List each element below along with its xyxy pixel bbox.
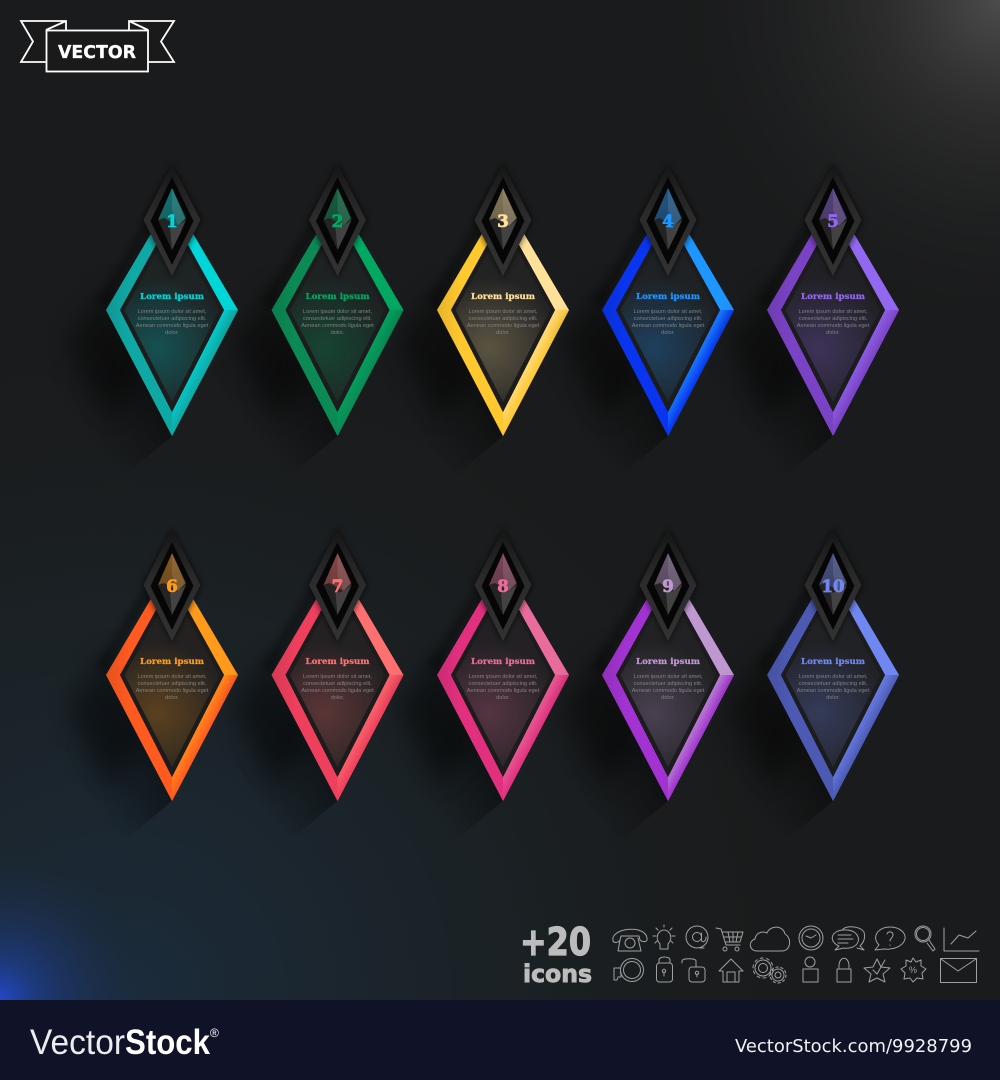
body text 4: Lorem ipsum dolor sit amet, — [633, 309, 703, 315]
long shadow 2 — [208, 222, 338, 486]
icon: light bulb — [653, 925, 675, 949]
ring 8 — [437, 563, 569, 801]
ring 10 — [767, 563, 899, 801]
icon: star check — [864, 959, 890, 982]
number gem 1 — [142, 163, 202, 278]
body text 10: Aenean commodo ligula eget — [797, 688, 870, 694]
body text 7: Lorem ipsum dolor sit amet, — [303, 674, 372, 680]
body text 7: consectetuer adipiscing elit. — [303, 681, 372, 687]
heading 10: Lorem ipsum — [801, 657, 865, 667]
body text 3: consectetuer adipiscing elit. — [469, 316, 538, 322]
heading 5: Lorem ipsum — [801, 292, 865, 302]
panel 1 — [120, 216, 224, 412]
icon: house — [719, 959, 743, 982]
long shadow 1 — [42, 222, 172, 486]
body text 2: dolor. — [331, 330, 345, 336]
number gem 2 — [308, 163, 368, 278]
body text 6: Aenean commodo ligula eget — [136, 688, 209, 694]
ring 7 — [272, 563, 404, 801]
ring 2 — [272, 198, 404, 436]
number gem 9 — [638, 528, 698, 643]
number gem 3 — [473, 163, 533, 278]
icon set — [613, 925, 979, 983]
label: +20 icons: icons — [523, 960, 592, 988]
body text 3: Lorem ipsum dolor sit amet, — [468, 309, 538, 315]
icon: lock — [656, 957, 672, 982]
logo: VectorStock: Vector — [30, 1023, 125, 1062]
heading 3: Lorem ipsum — [471, 292, 535, 302]
card 6 — [42, 528, 238, 851]
icon: gears — [753, 958, 786, 983]
icon: shopping cart — [716, 928, 743, 951]
body text 2: Lorem ipsum dolor sit amet, — [303, 309, 372, 315]
body text 1: dolor. — [165, 330, 179, 336]
badge: vector ribbon: VECTOR — [58, 42, 136, 63]
body text 7: Aenean commodo ligula eget — [301, 688, 374, 694]
heading 2: Lorem ipsum — [306, 292, 370, 302]
number gem 6 — [142, 528, 202, 643]
panel 8 — [451, 581, 555, 777]
card 10 — [703, 528, 899, 851]
logo: VectorStock: ® — [210, 1026, 219, 1040]
footer bar — [0, 1000, 1000, 1080]
long shadow 3 — [373, 222, 503, 486]
body text 2: Aenean commodo ligula eget — [301, 323, 374, 329]
panel 6 — [120, 581, 224, 777]
body text 8: Lorem ipsum dolor sit amet, — [468, 674, 538, 680]
number 10: 10 — [822, 577, 844, 596]
number 7: 7 — [332, 577, 343, 596]
long shadow 10 — [703, 587, 833, 851]
body text 3: Aenean commodo ligula eget — [467, 323, 540, 329]
icon: clock — [799, 926, 823, 950]
number 9: 9 — [662, 577, 674, 596]
label: +20 icons: +20 — [520, 920, 591, 964]
number gem 10 — [803, 528, 863, 643]
icon: telephone — [613, 929, 647, 951]
logo: VectorStock — [30, 1023, 219, 1062]
footer id text: VectorStock.com/9928799 — [735, 1036, 972, 1057]
icon: magnifier — [915, 926, 935, 951]
card 8 — [373, 528, 569, 851]
body text 4: Aenean commodo ligula eget — [632, 323, 705, 329]
body text 6: dolor. — [165, 695, 179, 701]
ring 3 — [437, 198, 569, 436]
body text 1: Lorem ipsum dolor sit amet, — [137, 309, 207, 315]
body text 6: consectetuer adipiscing elit. — [138, 681, 207, 687]
body text 5: Lorem ipsum dolor sit amet, — [798, 309, 868, 315]
number 3: 3 — [497, 212, 509, 231]
icon: chat bubbles — [832, 927, 865, 950]
ring 9 — [602, 563, 734, 801]
icon: man — [803, 957, 818, 982]
panel 9 — [616, 581, 720, 777]
body text 8: consectetuer adipiscing elit. — [469, 681, 538, 687]
long shadow 7 — [208, 587, 338, 851]
body text 1: consectetuer adipiscing elit. — [138, 316, 207, 322]
card 9 — [538, 528, 734, 851]
long shadow 4 — [538, 222, 668, 486]
number gem 8 — [473, 528, 533, 643]
number 1: 1 — [166, 212, 178, 231]
body text 6: Lorem ipsum dolor sit amet, — [137, 674, 207, 680]
body text 3: dolor. — [496, 330, 510, 336]
icon: open lock — [682, 959, 705, 982]
card 2 — [208, 163, 404, 486]
body text 10: consectetuer adipiscing elit. — [799, 681, 868, 687]
body text 10: dolor. — [826, 695, 840, 701]
panel 5 — [781, 216, 885, 412]
body text 8: Aenean commodo ligula eget — [467, 688, 540, 694]
body text 2: consectetuer adipiscing elit. — [303, 316, 372, 322]
icon: at sign — [686, 926, 708, 948]
heading 6: Lorem ipsum — [140, 657, 204, 667]
body text 5: consectetuer adipiscing elit. — [799, 316, 868, 322]
heading 9: Lorem ipsum — [636, 657, 700, 667]
logo: VectorStock: Stock — [125, 1023, 210, 1062]
icon: percent badge — [901, 958, 926, 982]
number gem 5 — [803, 163, 863, 278]
body text 7: dolor. — [331, 695, 345, 701]
number 8: 8 — [497, 577, 509, 596]
icon: cloud — [750, 927, 790, 951]
number 5: 5 — [827, 212, 839, 231]
number 4: 4 — [662, 212, 674, 231]
long shadow 6 — [42, 587, 172, 851]
card 4 — [538, 163, 734, 486]
body text 4: consectetuer adipiscing elit. — [634, 316, 703, 322]
body text 9: dolor. — [661, 695, 675, 701]
body text 9: Lorem ipsum dolor sit amet, — [633, 674, 703, 680]
long shadow 5 — [703, 222, 833, 486]
panel 7 — [286, 581, 390, 777]
icon: percent sign: % — [909, 965, 917, 975]
panel 10 — [781, 581, 885, 777]
icon: key — [614, 958, 644, 982]
number 2: 2 — [332, 212, 343, 231]
heading 8: Lorem ipsum — [471, 657, 535, 667]
card 7 — [208, 528, 404, 851]
long shadow 9 — [538, 587, 668, 851]
body text 5: dolor. — [826, 330, 840, 336]
card 5 — [703, 163, 899, 486]
body text 10: Lorem ipsum dolor sit amet, — [798, 674, 868, 680]
icon: line chart — [944, 928, 979, 951]
ring 1 — [106, 198, 238, 436]
ring 4 — [602, 198, 734, 436]
icon: question bubble — [875, 927, 905, 950]
panel 3 — [451, 216, 555, 412]
heading 7: Lorem ipsum — [306, 657, 370, 667]
icon: envelope — [940, 958, 976, 982]
badge: vector ribbon — [21, 21, 174, 72]
body text 5: Aenean commodo ligula eget — [797, 323, 870, 329]
icon: woman — [837, 958, 851, 982]
body text 4: dolor. — [661, 330, 675, 336]
heading 1: Lorem ipsum — [140, 292, 204, 302]
card 3 — [373, 163, 569, 486]
body text 9: Aenean commodo ligula eget — [632, 688, 705, 694]
panel 2 — [286, 216, 390, 412]
number 6: 6 — [166, 577, 178, 596]
label: +20 icons — [520, 920, 592, 988]
ring 5 — [767, 198, 899, 436]
body text 1: Aenean commodo ligula eget — [136, 323, 209, 329]
number gem 7 — [308, 528, 368, 643]
number gem 4 — [638, 163, 698, 278]
panel 4 — [616, 216, 720, 412]
card 1 — [42, 163, 238, 486]
heading 4: Lorem ipsum — [636, 292, 700, 302]
ring 6 — [106, 563, 238, 801]
long shadow 8 — [373, 587, 503, 851]
body text 9: consectetuer adipiscing elit. — [634, 681, 703, 687]
body text 8: dolor. — [496, 695, 510, 701]
